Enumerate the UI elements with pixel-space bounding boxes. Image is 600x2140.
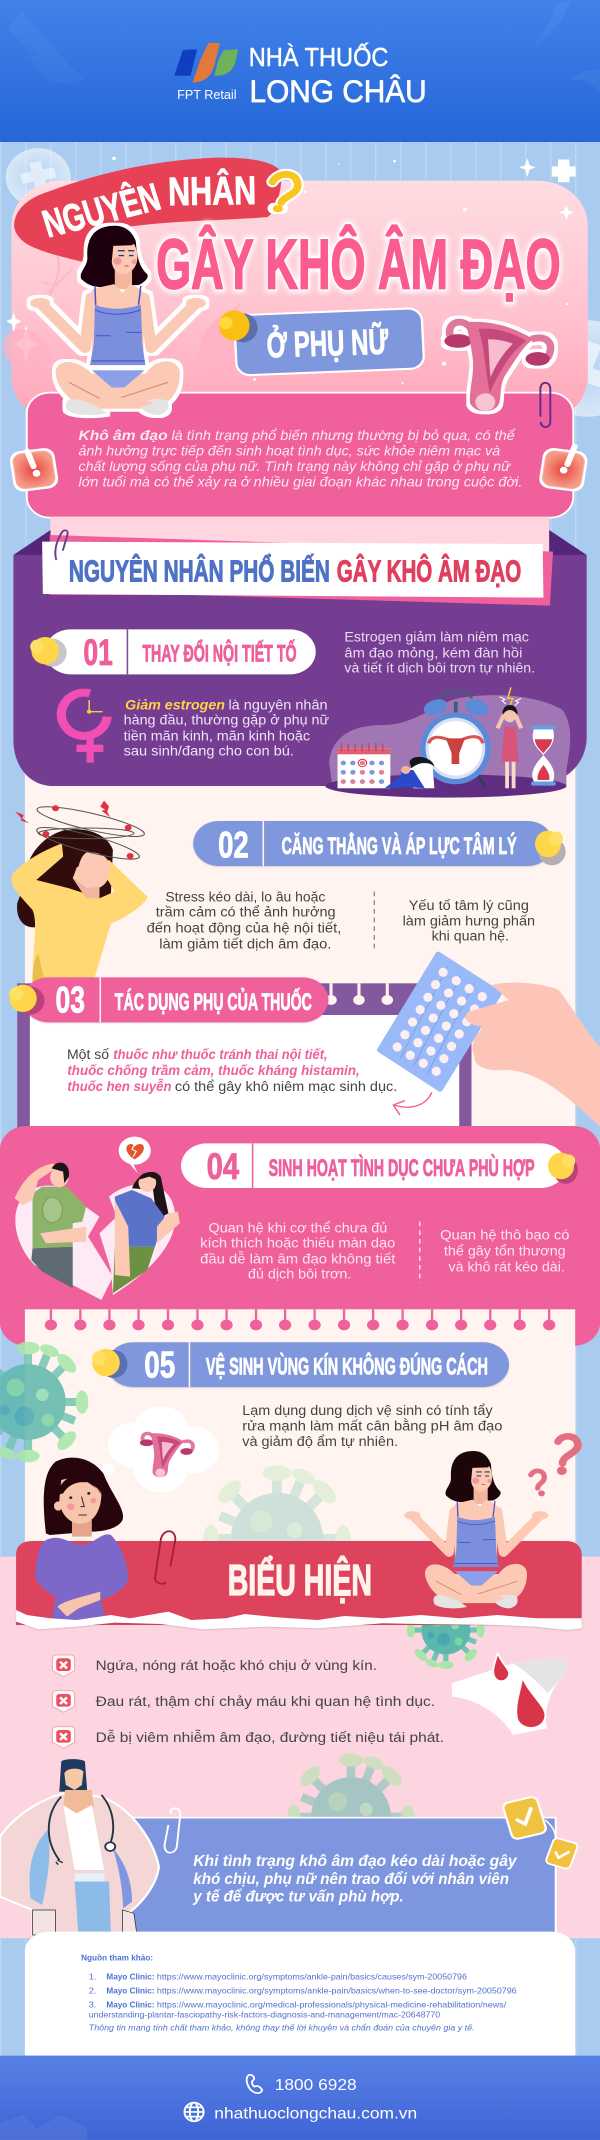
symptom 2: [52, 1691, 435, 1712]
references text: Mayo Clinic:: [106, 1986, 155, 1995]
references text: understanding-plantar-fasciopathy-risk-factors-diagnosis-and-management/mac-20648770: [89, 2010, 440, 2019]
references text: https://www.mayoclinic.org/medical-professionals/physical-medicine-rehabilitation/news/: [157, 2000, 507, 2009]
illustration: underwear with drops: [452, 1653, 567, 1735]
text: estrogen effect: âm đạo mỏng, kém đàn hồi: [344, 647, 522, 661]
references text: Nguồn tham khảo:: [81, 1953, 153, 1963]
pill 01: [30, 629, 316, 674]
text: rough foreplay: Quan hệ khi cơ thể chưa đủ: [209, 1221, 387, 1236]
button: ở phụ nữ: [219, 308, 424, 376]
text: psychology: khi quan hệ.: [432, 929, 509, 944]
symptom 3: [52, 1727, 444, 1748]
question mark yellow: [272, 174, 298, 209]
pill 04: [181, 1143, 578, 1188]
text: hygiene: [242, 1404, 502, 1450]
illustration: couple: [15, 1137, 180, 1300]
man: [15, 1163, 86, 1288]
symptom 1: Ngứa, nóng rát hoặc khó chịu ở vùng kín.: [96, 1659, 377, 1674]
symptom 2: Đau rát, thậm chí chảy máu khi quan hệ tình dục.: [96, 1695, 435, 1710]
heading: symptoms: BIỂU HIỆN: [228, 1554, 372, 1605]
text: rough sex: thể gây tổn thương: [444, 1244, 566, 1259]
references text: Mayo Clinic:: [106, 2000, 155, 2009]
hourglass: [531, 725, 556, 786]
decorative leaves: [0, 255, 263, 389]
references text: [81, 1953, 517, 2032]
illustration: virus left: [0, 1342, 88, 1462]
panel: advice card: [130, 1818, 556, 1934]
torn paper edge: [16, 1610, 582, 1630]
text: rough foreplay: kích thích hoặc thiếu màn dạo: [200, 1236, 395, 1251]
title banner: [42, 535, 553, 606]
cream panel: [25, 763, 575, 1430]
thought cloud: [90, 1406, 219, 1492]
text: rough sex: Quan hệ thô bạo có: [440, 1228, 569, 1243]
pink symptoms background: [0, 1557, 600, 1938]
banner: symptoms: [16, 1541, 582, 1625]
text: rough sex: và khô rát kéo dài.: [449, 1260, 565, 1275]
text: medication: thuốc hen suyễn: [67, 1079, 171, 1095]
question mark: [272, 174, 298, 208]
text: stress: trầm cảm có thể ảnh hưởng: [156, 905, 336, 920]
question marks: [531, 1436, 578, 1488]
text: estrogen main cause: hàng đầu, thường gặp ở phụ nữ: [124, 714, 329, 728]
text: hygiene: Lạm dụng dung dịch vệ sinh có tính tẩy: [242, 1404, 493, 1419]
text: stress: [147, 890, 341, 952]
illustration: worried woman: [35, 1458, 128, 1622]
text: stress: đến hoạt động của hệ nội tiết,: [147, 921, 341, 936]
decorative bubble right: [534, 320, 600, 417]
heading: Nguyên nhân: NGUYÊN: [37, 175, 165, 246]
advice text: [192, 1853, 517, 1905]
pill 03: TÁC DỤNG PHỤ CỦA THUỐC: [115, 987, 312, 1016]
references text: 1.: [89, 1972, 96, 1981]
pill 04: 04: [207, 1146, 240, 1187]
pill 05: [92, 1342, 509, 1387]
advice text: Khi tình trạng khô âm đạo kéo dài hoặc gây: [193, 1853, 517, 1870]
panel: pink cause 04: [0, 1126, 600, 1346]
website: nhathuoclongchau.com.vn: [214, 2103, 417, 2122]
speech bubble: broken heart: [119, 1137, 151, 1173]
title banner: NGUYÊN NHÂN PHỔ BIẾN: [69, 554, 330, 588]
speech bubble: red: [14, 158, 281, 262]
calendar: [338, 743, 390, 788]
icon: phone: [247, 2075, 262, 2093]
perforation drops: [45, 1309, 555, 1330]
icon: alert left: [8, 445, 60, 493]
references text: Thông tin mang tính chất tham khảo, không thay thế lời khuyên và chẩn đoán của chuyên gia y tế.: [89, 2023, 475, 2032]
cream panel lower: [25, 1309, 575, 1558]
text: stress: Stress kéo dài, lo âu hoặc: [165, 890, 325, 905]
text: psychology: làm giảm hưng phấn: [403, 914, 535, 929]
illustration: stressed woman: [11, 801, 147, 987]
illustration: woman sitting: [30, 226, 206, 415]
intro text: lớn tuổi mà có thể xảy ra ở nhiều giai đoạn khác nhau trong cuộc đời.: [78, 475, 522, 490]
references text: 3.: [89, 2000, 96, 2009]
illustration: pale virus centre: [203, 1465, 351, 1613]
button: ở phụ nữ: Ở PHỤ NỮ: [266, 321, 389, 366]
header band: [0, 0, 600, 142]
text: estrogen main cause: [124, 698, 329, 759]
advice text: y tế để được tư vấn phù hợp.: [192, 1889, 404, 1905]
brand name: [249, 42, 427, 110]
text: medication: [67, 1048, 397, 1095]
standing woman: [498, 687, 521, 788]
panel: intro text card: [27, 393, 573, 518]
symptom 3: Dễ bị viêm nhiễm âm đạo, đường tiết niệu tái phát.: [96, 1730, 444, 1746]
text: hygiene: và giảm độ ẩm tự nhiên.: [242, 1435, 398, 1450]
sitting figure: [385, 757, 434, 788]
pill 02: 02: [218, 824, 249, 866]
medical cross: [552, 159, 576, 182]
icon: globe: [184, 2103, 204, 2121]
illustration: uterus in cloud: [140, 1433, 193, 1477]
illustration: uterus: [444, 322, 551, 411]
text: estrogen effect: Estrogen giảm làm niêm mạc: [344, 631, 529, 645]
section: cause 05 pill: [92, 1342, 509, 1387]
text: medication: có thể gây khô niêm mạc sinh dục.: [175, 1080, 397, 1095]
text: estrogen main cause: Giảm estrogen: [125, 698, 225, 713]
panel: references: [25, 1932, 575, 2056]
illustration: hand: [465, 983, 600, 1127]
brand name: NHÀ THUỐC: [249, 42, 388, 72]
virus under banner, on pink: [407, 1591, 485, 1669]
pill 03: [9, 977, 328, 1022]
text: rough foreplay: [200, 1221, 395, 1282]
advice text: khó chịu, phụ nữ nên trao đổi với nhân viên: [193, 1871, 509, 1888]
FPT logo: FPT Retail: [177, 87, 237, 102]
text: psychology: [403, 899, 535, 944]
section: causes, part one: [11, 517, 587, 1430]
FPT logo: [174, 43, 238, 102]
arrow: [393, 1092, 432, 1115]
references text: 2.: [89, 1986, 96, 1995]
paperclip: [540, 383, 550, 427]
symptom 1: [52, 1655, 377, 1677]
intro text: chất lượng sống của phụ nữ. Tình trạng này không chỉ gặp ở phụ nữ: [78, 460, 511, 475]
text: estrogen main cause: sau sinh/đang cho con bú.: [124, 744, 294, 759]
pill 02: [193, 821, 566, 866]
paperclip: [155, 1531, 175, 1584]
text: rough sex: [440, 1228, 569, 1275]
illustration: doctor: [0, 1759, 159, 1935]
section: cause 03: [0, 954, 600, 1558]
woman: [113, 1172, 180, 1293]
sparkle stars: [6, 157, 574, 384]
fold corners: [13, 530, 587, 555]
heading: Nguyên nhân: NHÂN: [168, 167, 257, 214]
text: medication: Một số: [67, 1048, 109, 1063]
references text: https://www.mayoclinic.org/symptoms/ankle-pain/basics/when-to-see-doctor/sym-20050796: [157, 1986, 517, 1995]
text: estrogen main cause: tiền mãn kinh, mãn kinh hoặc: [124, 729, 310, 744]
section: advice and sources: [0, 1759, 600, 2140]
question dots: [538, 1466, 567, 1496]
text: rough foreplay: đầu dễ làm âm đạo không tiết: [200, 1251, 395, 1267]
intro text: Khô âm đạo: [78, 429, 168, 444]
logo and brand: [174, 42, 427, 110]
pill 05: 05: [144, 1344, 175, 1386]
paperclip: [165, 1808, 180, 1853]
pill 01: THAY ĐỔI NỘI TIẾT TỐ: [142, 639, 297, 667]
alarm clock: [420, 691, 492, 787]
text: estrogen effect: và tiết ít dịch bôi trơn tự nhiên.: [344, 662, 535, 676]
intro text: ảnh hưởng trực tiếp đến sinh hoạt tình dục, sức khỏe niêm mạc và: [78, 444, 500, 459]
illustration: pale virus bottom: [287, 1753, 415, 1881]
panel: hero pink card: [11, 181, 588, 422]
paperclip: [55, 530, 68, 560]
icon: check small: [545, 1837, 579, 1870]
pill 01: 01: [83, 632, 113, 673]
phone number: 1800 6928: [275, 2075, 357, 2094]
intro text: [78, 429, 522, 490]
footer band: [0, 2056, 600, 2140]
references text: https://www.mayoclinic.org/symptoms/ankle-pain/basics/causes/sym-20050796: [157, 1972, 467, 1981]
decorative bubble left: [6, 148, 71, 207]
text: medication: thuốc chống trầm cảm, thuốc kháng histamin,: [67, 1064, 360, 1079]
section: banner foreground: [16, 1458, 582, 1748]
icon: check large: [502, 1796, 555, 1842]
text: estrogen effect: [344, 631, 535, 676]
text: rough foreplay: đủ dịch bôi trơn.: [248, 1267, 351, 1282]
text: medication: thuốc như thuốc tránh thai nội tiết,: [113, 1048, 328, 1063]
references text: Mayo Clinic:: [106, 1972, 155, 1981]
text: stress: làm giảm tiết dịch âm đạo.: [159, 937, 331, 952]
hero section: [0, 148, 600, 518]
text: hygiene: rửa mạnh làm mất cân bằng pH âm đạo: [242, 1419, 502, 1434]
section: hygiene and symptoms: [0, 1404, 600, 1938]
intro text: là tình trạng phổ biến nhưng thường bị bỏ qua, có thể: [171, 429, 516, 444]
text: estrogen main cause: là nguyên nhân: [228, 698, 328, 713]
fold sheet: [51, 517, 549, 557]
icon: female clock: [61, 693, 107, 763]
illustration: woman with questions: [404, 1451, 548, 1608]
brand name: LONG CHÂU: [250, 75, 427, 110]
icon: alert right: [538, 440, 590, 493]
pill 03: 03: [55, 979, 85, 1021]
illustration: pill pack: [380, 954, 499, 1089]
text: psychology: Yếu tố tâm lý cũng: [409, 899, 529, 914]
panel: purple frame card: [17, 983, 471, 1130]
panel: purple cause 01: [13, 555, 587, 786]
illustration: hormone change scene: [325, 687, 570, 798]
